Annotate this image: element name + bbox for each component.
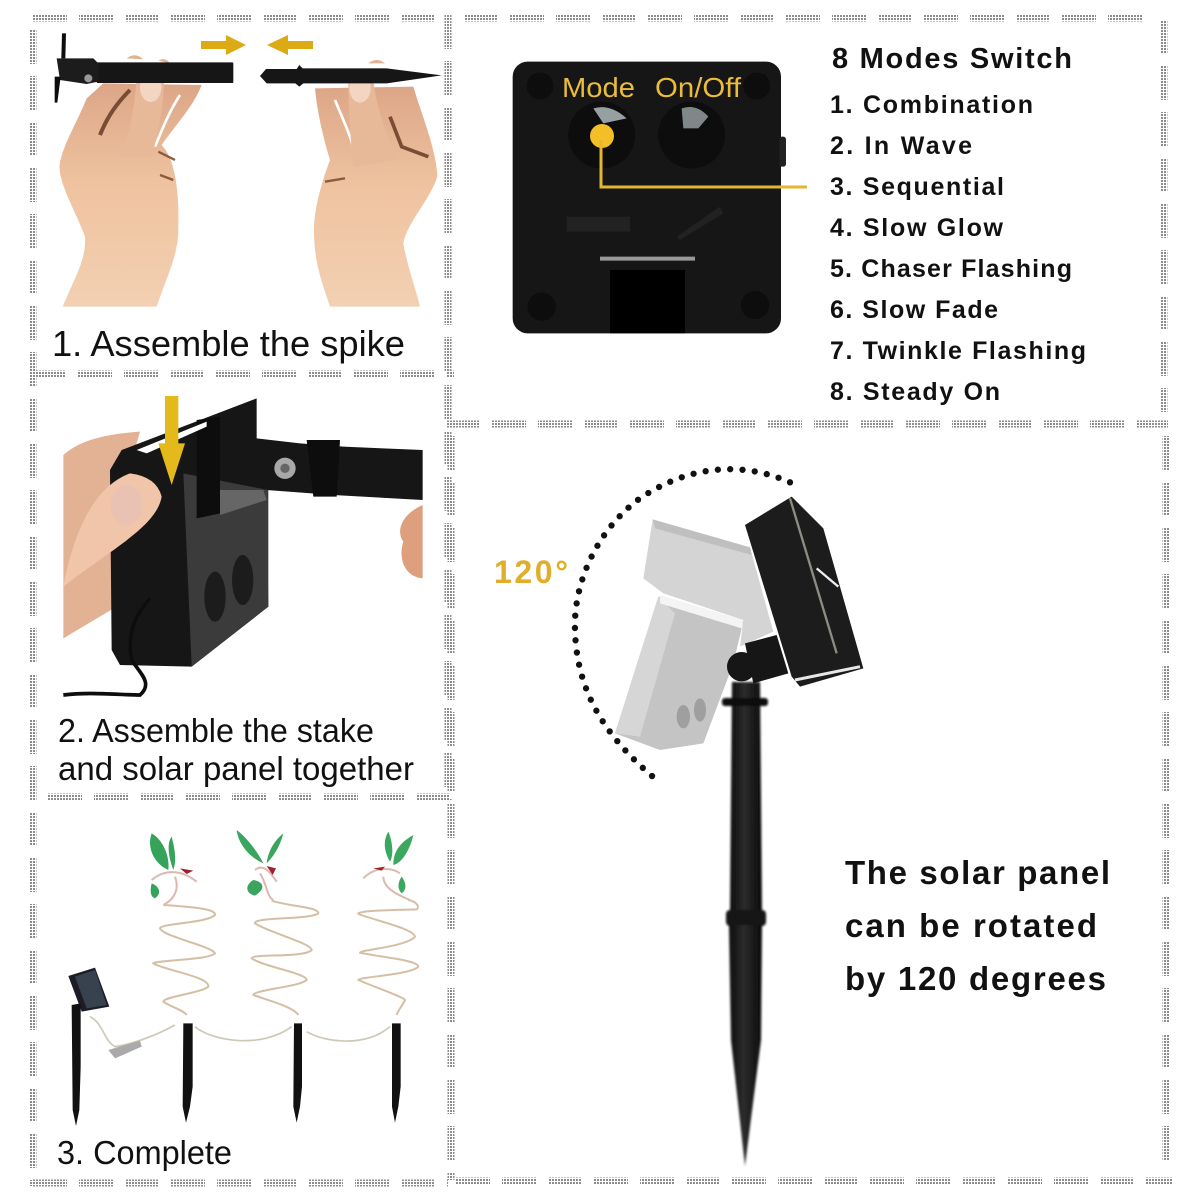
arrow: pointing left: [267, 35, 313, 55]
label: On/Off: On/Off: [655, 72, 741, 103]
panel: rotating solar panel: [494, 469, 1110, 1166]
list: mode names: 7. Twinkle Flashing: [830, 337, 1086, 365]
list: mode names: 5. Chaser Flashing: [830, 255, 1072, 283]
panel: switch box and modes: [513, 43, 1086, 406]
photo: switch box back: [513, 62, 807, 333]
list: mode names: 6. Slow Fade: [830, 296, 998, 324]
caption: step 2: and solar panel together: [58, 750, 414, 787]
text: rotation note: The solar panel: [845, 854, 1110, 891]
caption: step 2: 2. Assemble the stake: [58, 712, 374, 749]
list: mode names: [830, 91, 1086, 406]
illustration: stake with solar panel and ghost positions: [615, 497, 863, 1166]
caption: step 1: 1. Assemble the spike: [52, 323, 405, 364]
list: mode names: 2. In Wave: [830, 132, 972, 160]
caption: step 2: [58, 712, 414, 787]
rotation angle label: 120°: [494, 554, 568, 590]
text: rotation note: by 120 degrees: [845, 960, 1106, 997]
arrow: pointing right: [201, 35, 246, 55]
illustration: three hummingbird stakes connected to solar panel: [68, 830, 418, 1126]
photo: hands holding spike parts: [55, 33, 442, 307]
dotted rotation arc: [575, 469, 790, 783]
text: rotation note: can be rotated: [845, 907, 1097, 944]
panel: step 2 assemble stake and solar panel: [58, 396, 423, 787]
list: mode names: 1. Combination: [830, 91, 1033, 119]
panel: step 3 complete: [57, 830, 418, 1171]
list: mode names: 3. Sequential: [830, 173, 1004, 201]
list: mode names: 4. Slow Glow: [830, 214, 1004, 242]
label: Mode: Mode: [562, 72, 635, 103]
heading: 8 Modes Switch: 8 Modes Switch: [832, 43, 1072, 75]
panel: step 1 assemble the spike: [52, 33, 442, 364]
caption: step 3: 3. Complete: [57, 1134, 232, 1171]
text: rotation note: [845, 854, 1110, 997]
list: mode names: 8. Steady On: [830, 378, 1000, 406]
pointer line from mode button: [590, 124, 807, 187]
photo: hand attaching stake to solar panel box: [63, 396, 423, 695]
